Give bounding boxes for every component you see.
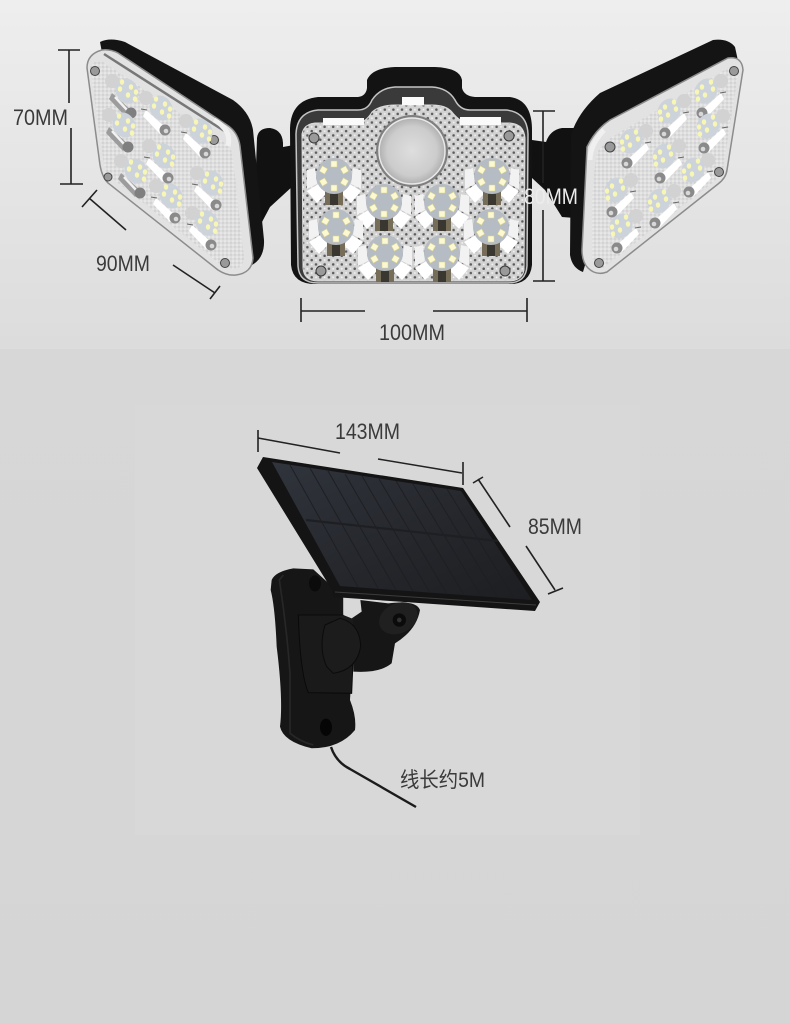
dimension: 90MM: 90MM bbox=[96, 251, 150, 276]
right lamp LEDs bbox=[600, 74, 730, 254]
dimension: 100MM bbox=[301, 298, 527, 345]
reflector highlights bbox=[323, 97, 501, 125]
background: lower band bbox=[0, 349, 790, 1023]
left lamp head bbox=[87, 40, 294, 275]
cable length label: 线长约5M bbox=[400, 769, 485, 792]
right lamp head bbox=[532, 40, 743, 273]
left lamp chrome glint bbox=[214, 120, 229, 146]
solar panel assembly bbox=[257, 457, 540, 807]
left lamp screws bbox=[90, 66, 230, 268]
left lamp swivel mount bbox=[254, 128, 294, 222]
right lamp glass bbox=[582, 58, 743, 273]
solar panel frame bbox=[257, 457, 540, 611]
left lamp LEDs bbox=[102, 74, 228, 250]
dimension: 143MM: 143MM bbox=[335, 419, 400, 444]
corner screws bbox=[309, 131, 514, 276]
right lamp screws bbox=[594, 66, 738, 268]
dimension: 90MM bbox=[82, 190, 220, 299]
bracket pivot arm bbox=[353, 600, 420, 672]
dimension: 100MM: 100MM bbox=[379, 320, 445, 345]
left lamp reflector bbox=[90, 62, 244, 269]
dimension: 70MM: 70MM bbox=[13, 105, 68, 130]
dimension: 80MM bbox=[524, 111, 578, 281]
wall bracket bbox=[271, 568, 423, 748]
dimension: 70MM bbox=[13, 50, 83, 184]
left lamp rim line bbox=[104, 54, 226, 132]
PIR motion sensor bbox=[376, 115, 448, 187]
background: upper band bbox=[0, 0, 790, 349]
dimension: 143MM bbox=[258, 419, 463, 485]
cable bbox=[331, 747, 416, 807]
central lamp glass rim bbox=[296, 87, 528, 283]
LED cluster bbox=[307, 158, 519, 282]
right lamp black housing bbox=[570, 40, 740, 272]
central lamp black housing bbox=[290, 67, 532, 284]
central lamp dotted reflector bbox=[302, 105, 525, 281]
mounting holes bbox=[320, 719, 332, 736]
dimension: 80MM: 80MM bbox=[524, 184, 578, 209]
central lamp head bbox=[290, 67, 532, 284]
solar panel surface bbox=[272, 462, 532, 600]
left lamp glass bbox=[87, 50, 253, 275]
dimension: 85MM bbox=[473, 477, 582, 594]
bracket knob bbox=[322, 618, 361, 673]
right lamp reflector bbox=[592, 67, 738, 268]
solar cell grid bbox=[290, 465, 515, 599]
dimension: 85MM: 85MM bbox=[528, 514, 582, 539]
right lamp swivel mount bbox=[532, 128, 575, 218]
background: lighter centre block bbox=[135, 405, 640, 835]
right lamp chrome glint bbox=[590, 130, 604, 160]
left lamp black housing bbox=[100, 40, 264, 272]
panel front lip highlight bbox=[335, 592, 536, 605]
